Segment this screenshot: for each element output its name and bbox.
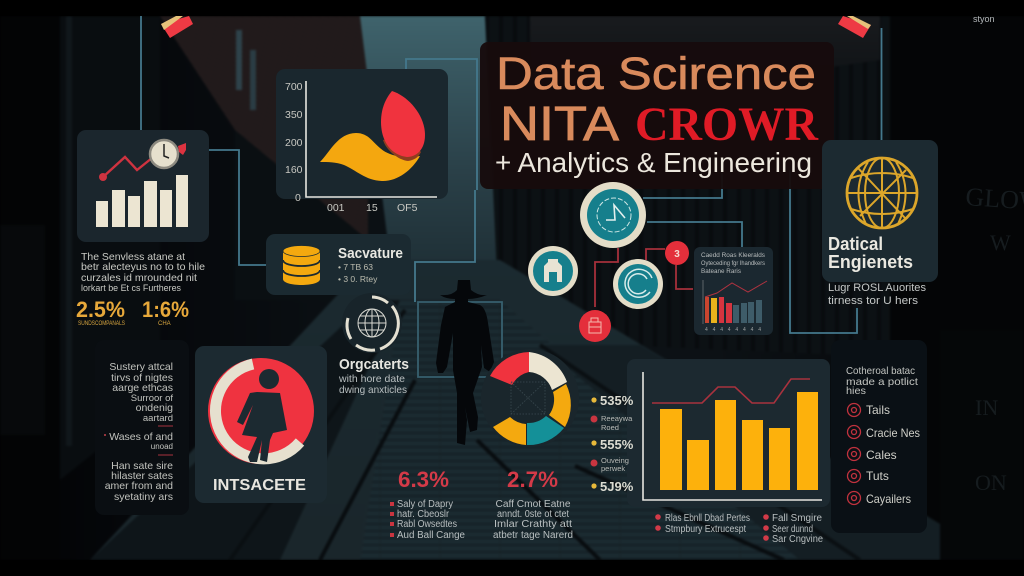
chart caption: Bateane Raris	[701, 269, 741, 275]
text block: organisers	[338, 356, 409, 396]
panel: left notes: Surroor of	[131, 393, 173, 404]
icon: red number badge	[665, 241, 689, 265]
stat: 6.3% with list	[390, 467, 465, 541]
panel: database	[266, 234, 411, 295]
chart caption	[701, 253, 765, 275]
icon: teal spiral circle	[613, 259, 663, 309]
panel: right list	[831, 340, 927, 533]
icon: right ceiling lamp	[838, 16, 871, 38]
text block: left intro: betr alecteyus no to to hile	[81, 261, 205, 273]
list intro	[846, 365, 918, 397]
panel: database: Sacvature	[338, 245, 403, 262]
text block: organisers: dwing anxticles	[339, 384, 407, 396]
icon: gold globe	[847, 158, 917, 228]
panel: person card	[195, 346, 327, 503]
yellow area shape	[320, 133, 420, 181]
list labels: Tuts	[866, 469, 889, 483]
donut centre detail	[511, 382, 545, 414]
stat: 1:6%: CHA	[158, 321, 171, 327]
panel: left notes: unoad	[151, 442, 173, 451]
axis labels: 0	[295, 192, 301, 204]
bar chart legend: Fall Smgire	[772, 513, 822, 524]
donut legend: 535%	[600, 393, 634, 408]
text block: left intro: curzales id mrounded nit	[81, 272, 197, 284]
connector lines: red	[595, 248, 693, 307]
stat: 2.7% with note: Imlar Crathty att	[494, 519, 572, 530]
background lettering: right wall sign: IN	[975, 395, 998, 420]
bar chart legend	[655, 513, 823, 545]
list labels: Cales	[866, 448, 897, 462]
stat: 6.3% with list: hatr. Cbeoslr	[397, 509, 450, 520]
panel: small combo chart	[694, 247, 773, 335]
segment: lower yellow	[493, 417, 526, 445]
axis labels: 15	[366, 202, 378, 214]
panel: left notes: syetatiny ars	[114, 491, 173, 503]
panel: line and bar icon	[77, 130, 209, 242]
list labels: Cracie Nes	[866, 426, 920, 440]
panel: left notes: Han sate sire	[111, 460, 173, 472]
donut chart	[481, 349, 579, 447]
axis labels: 160	[285, 164, 303, 176]
list intro: hies	[846, 385, 866, 397]
bar chart legend: Seer dunnd	[772, 524, 813, 535]
bars	[705, 297, 762, 323]
chart caption: Oyteceding fgr Ihandkers	[701, 261, 765, 267]
axes	[643, 372, 822, 500]
segment: cream	[529, 352, 567, 390]
background lettering: right wall sign	[965, 182, 1024, 495]
bar chart legend: Stmpbury Extrucespt	[665, 524, 746, 535]
panel: left notes	[95, 340, 189, 515]
stat: 6.3% with list: Saly of Dapry	[397, 499, 453, 510]
panel: left notes: Wases of and	[109, 431, 173, 443]
text block: globe caption: tirness tor U hers	[828, 295, 919, 307]
icon: left ceiling lamp	[161, 16, 193, 38]
figure: silhouette	[436, 280, 494, 445]
bars	[96, 175, 188, 227]
list icons	[848, 404, 860, 504]
axis labels: 001	[327, 202, 345, 214]
line	[705, 281, 767, 297]
segment: teal	[527, 416, 564, 445]
text block: organisers: with hore date	[338, 373, 405, 385]
panel: database: • 7 TB 63	[338, 262, 373, 272]
text block: globe caption: Lugr ROSL Auorites	[828, 282, 927, 294]
panel: title	[480, 42, 834, 189]
heading: line one: Data Scirence	[496, 48, 816, 99]
stat: 2.7% with note: Caff Cmot Eatne	[496, 499, 571, 510]
bars	[660, 392, 818, 490]
subtitle: + Analytics & Engineering	[495, 147, 812, 178]
stat: 6.3% with list: 6.3%	[398, 467, 449, 492]
stat: 6.3% with list: Aud Ball Cange	[397, 530, 465, 541]
stat: 2.7% with note: anndt. 0ste ot ctet	[497, 509, 569, 520]
axis labels: 350	[285, 109, 303, 121]
axis labels: 200	[285, 137, 303, 149]
panel: left notes: tirvs of nigtes	[111, 372, 173, 384]
list intro: made a potlict	[846, 376, 918, 388]
axis labels: 700	[285, 81, 303, 93]
stat: 2.5%: 2.5%	[76, 297, 125, 322]
red shape	[381, 91, 425, 157]
panel: left notes: Sustery attcal	[109, 361, 173, 373]
panel: left notes: ondenig	[136, 402, 173, 414]
icon: database cylinder	[283, 246, 320, 285]
panel: person card: INTSACETE	[213, 477, 306, 494]
segment: red	[490, 352, 529, 385]
segment: yellow	[549, 384, 571, 427]
panel: database: • 3 0. Rtey	[338, 274, 378, 284]
donut legend: 5J9%	[600, 479, 634, 494]
panel: top area chart	[276, 69, 448, 214]
text block: left intro	[81, 251, 205, 293]
list labels: Cayailers	[866, 492, 911, 506]
heading: line two: CROWR	[635, 98, 819, 151]
text block: globe caption	[828, 282, 927, 307]
bar chart legend: Sar Cngvine	[772, 534, 823, 545]
donut legend: Roed	[601, 423, 619, 432]
trend line	[103, 157, 152, 177]
panel: left notes: hilaster sates	[111, 470, 173, 482]
donut legend: Ouveing	[601, 456, 629, 465]
icon: teal building circle	[528, 246, 578, 296]
stat: 2.7% with note	[493, 467, 573, 541]
bar chart legend: Rlas Ebnll Dbad Pertes	[665, 513, 750, 524]
red shape shadow	[383, 135, 421, 161]
panel: small combo chart: 4 4 4 4 4 4 4 4	[705, 327, 761, 333]
background lettering: right wall sign: ON	[975, 470, 1007, 495]
axis labels: OF5	[397, 202, 418, 214]
chart caption: Caedd Roas Kleeralds	[701, 253, 765, 259]
text block: left intro: lorkart be Et cs Furtheres	[81, 283, 181, 293]
trend line	[652, 379, 810, 403]
heading: line two: NITA	[500, 98, 619, 151]
background lettering: right wall sign: W	[990, 230, 1011, 255]
panel: globe card: Datical	[828, 234, 883, 254]
donut legend: 555%	[600, 437, 634, 452]
list labels	[866, 403, 920, 506]
panel: globe card: Engienets	[828, 252, 913, 272]
icon: organisation ring	[342, 293, 402, 353]
icon: teal clock circle	[580, 182, 646, 248]
stat: 2.7% with note: atbetr tage Narerd	[493, 530, 573, 541]
stat: 6.3% with list: Rabl Owsedtes	[397, 519, 457, 530]
icon: clock	[150, 140, 178, 168]
list labels: Tails	[866, 403, 890, 417]
donut legend: Reeaywa	[601, 414, 633, 423]
icon: red number badge: 3	[674, 249, 680, 260]
panel: left notes: aartard	[143, 413, 173, 424]
watermark: styon	[973, 14, 995, 24]
axes	[306, 81, 437, 197]
panel: left notes: aarge ethcas	[112, 382, 173, 394]
panel: main bar chart	[627, 359, 830, 507]
heading: line two	[500, 98, 819, 151]
axis labels	[285, 81, 418, 214]
icon: red briefcase badge	[579, 310, 611, 342]
panel: left notes: amer from and	[105, 480, 173, 492]
donut legend: perwek	[601, 464, 625, 473]
stat: 2.5%: SUNDSCOMPANALS	[78, 321, 125, 327]
text block: left intro: The Senvless atane at	[81, 251, 185, 263]
panel: globe card	[822, 140, 938, 282]
icon: ring with person	[208, 358, 314, 464]
connector lines: blue	[141, 16, 882, 377]
stat: 1:6%: 1:6%	[142, 297, 189, 322]
text block: organisers: Orgcaterts	[339, 356, 409, 373]
donut legend	[590, 393, 634, 494]
icon: small globe	[358, 309, 386, 337]
stat: 2.7% with note: 2.7%	[507, 467, 558, 492]
list intro: Cotheroal batac	[846, 365, 915, 377]
